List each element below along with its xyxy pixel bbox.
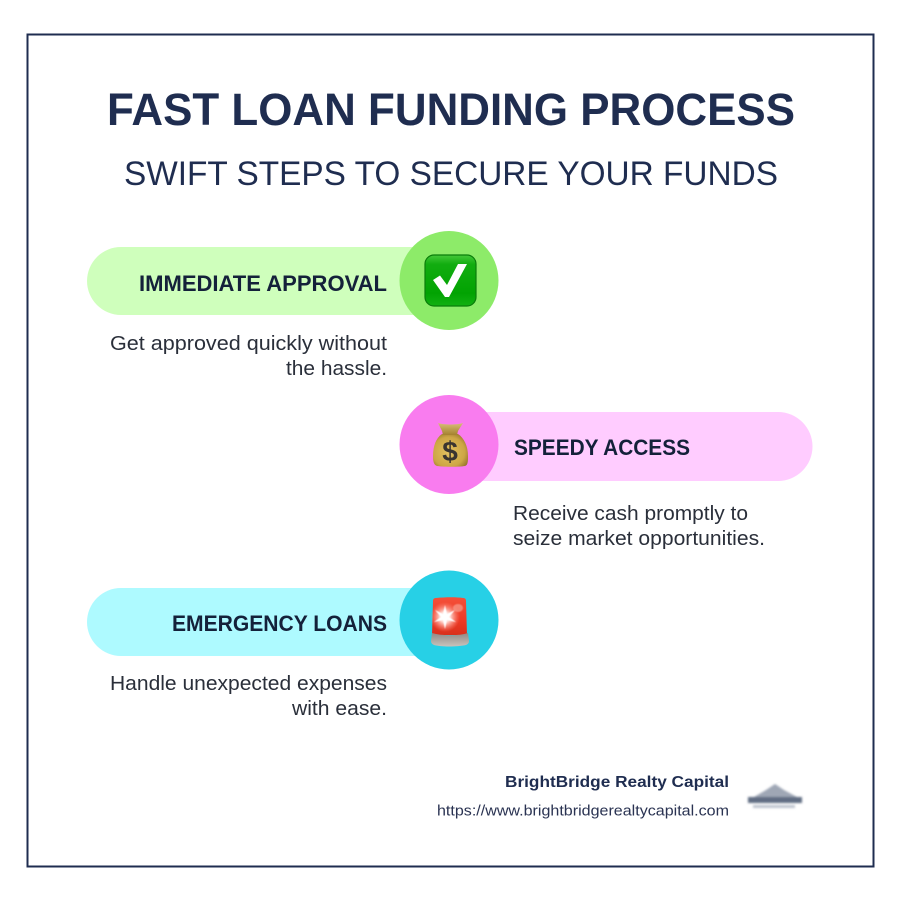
step 3: emergency loans (87, 570, 498, 720)
description: emergency loans: with ease. (291, 698, 387, 720)
description: immediate approval: the hassle. (286, 358, 387, 380)
icon: siren light (430, 597, 469, 646)
heading: speedy access: SPEEDY ACCESS (514, 435, 690, 460)
footer: company name: BrightBridge Realty Capital (505, 774, 729, 791)
icon: money bag (433, 423, 468, 467)
subtitle: SWIFT STEPS TO SECURE YOUR FUNDS (124, 155, 778, 193)
title: FAST LOAN FUNDING PROCESS (107, 84, 795, 135)
description: speedy access: Receive cash promptly to (513, 503, 748, 525)
icon circle: green (400, 231, 498, 330)
icon: check mark (425, 255, 476, 306)
footer: logo (748, 784, 802, 808)
heading: emergency loans: EMERGENCY LOANS (172, 611, 387, 636)
description: emergency loans: Handle unexpected expenses (110, 673, 387, 695)
pill: speedy access (449, 412, 813, 481)
icon circle: cyan (400, 570, 498, 670)
description: immediate approval: Get approved quickly without (110, 333, 387, 355)
pill: immediate approval (87, 247, 449, 315)
icon circle: pink (400, 395, 498, 494)
step 1: immediate approval (87, 231, 499, 380)
description: speedy access: seize market opportunities. (513, 528, 765, 550)
pill: emergency loans (87, 588, 449, 656)
heading: immediate approval: IMMEDIATE APPROVAL (139, 271, 387, 296)
footer: website url: https://www.brightbridgerealtycapital.com (437, 804, 729, 820)
icon: money bag: $ (442, 436, 458, 467)
step 2: speedy access (400, 395, 813, 550)
